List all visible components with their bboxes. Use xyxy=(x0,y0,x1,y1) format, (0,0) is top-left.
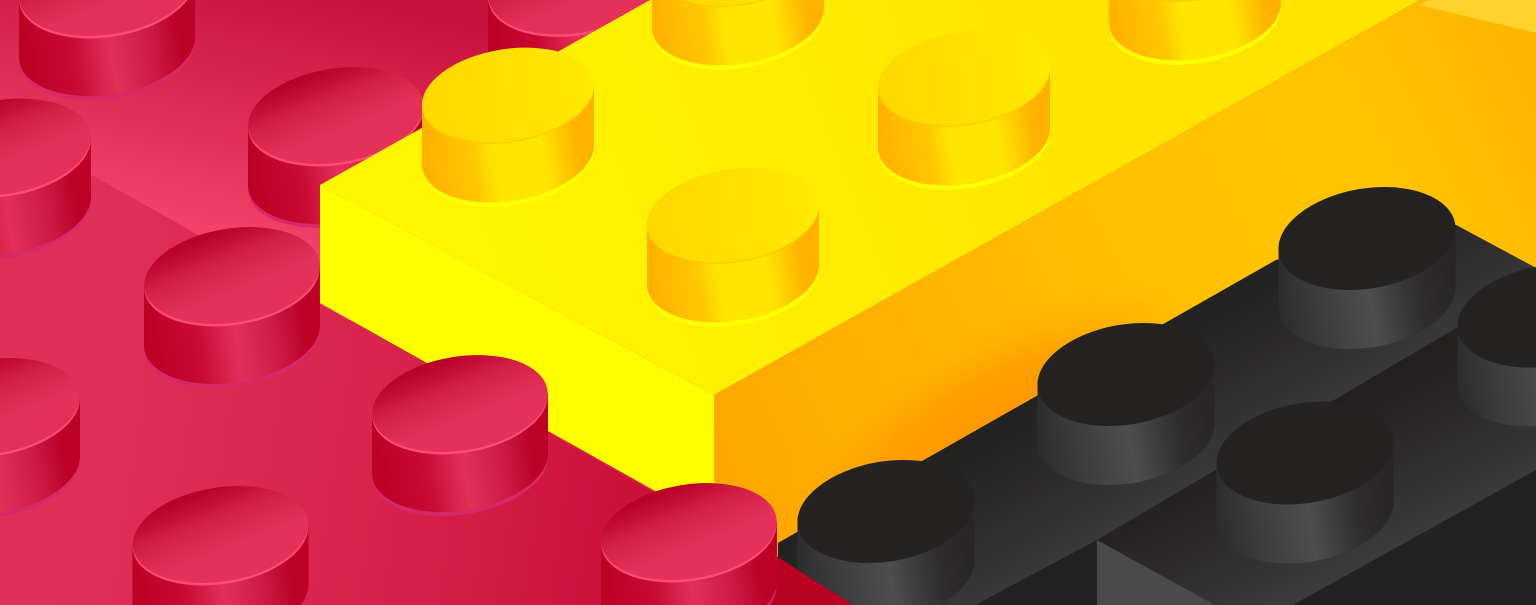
yellow brick left face xyxy=(320,185,714,524)
orange brick right face xyxy=(714,0,1536,560)
red back plate xyxy=(0,0,700,320)
black left dark face xyxy=(980,540,1097,605)
red stud: left edge upper xyxy=(0,87,98,271)
red plate front corner xyxy=(770,552,853,605)
red stud: front bottom xyxy=(594,471,784,605)
red front plate xyxy=(0,123,853,605)
red stud: centre xyxy=(137,215,327,400)
red stud: top left xyxy=(12,0,202,112)
yellow stud: top centre xyxy=(645,0,831,82)
pale yellow corner highlight xyxy=(1419,0,1536,33)
red stud: middle xyxy=(365,343,555,528)
yellow stud: left xyxy=(415,36,601,219)
black brick upper plate xyxy=(778,225,1536,605)
black brick lower plate xyxy=(1097,281,1536,605)
black stud: right edge xyxy=(1450,252,1536,439)
orange shading near black brick xyxy=(714,0,1536,560)
yellow stud: front xyxy=(640,156,826,339)
black stud: middle xyxy=(1030,310,1222,498)
red stud: upper middle xyxy=(241,55,431,240)
black lower dark face xyxy=(1293,470,1536,605)
black stud: bottom xyxy=(790,447,982,605)
black stud: top xyxy=(1271,174,1463,362)
black stud: lower xyxy=(1209,389,1401,576)
red stud: bottom left xyxy=(126,474,315,605)
yellow stud: right xyxy=(871,19,1057,202)
black brick base xyxy=(778,225,1536,605)
yellow stud: top right xyxy=(1102,0,1288,77)
yellow brick top face xyxy=(320,0,1420,395)
grey side facet xyxy=(1097,540,1215,605)
red stud: top behind yellow brick xyxy=(481,0,671,110)
red stud: left edge lower xyxy=(0,346,87,531)
